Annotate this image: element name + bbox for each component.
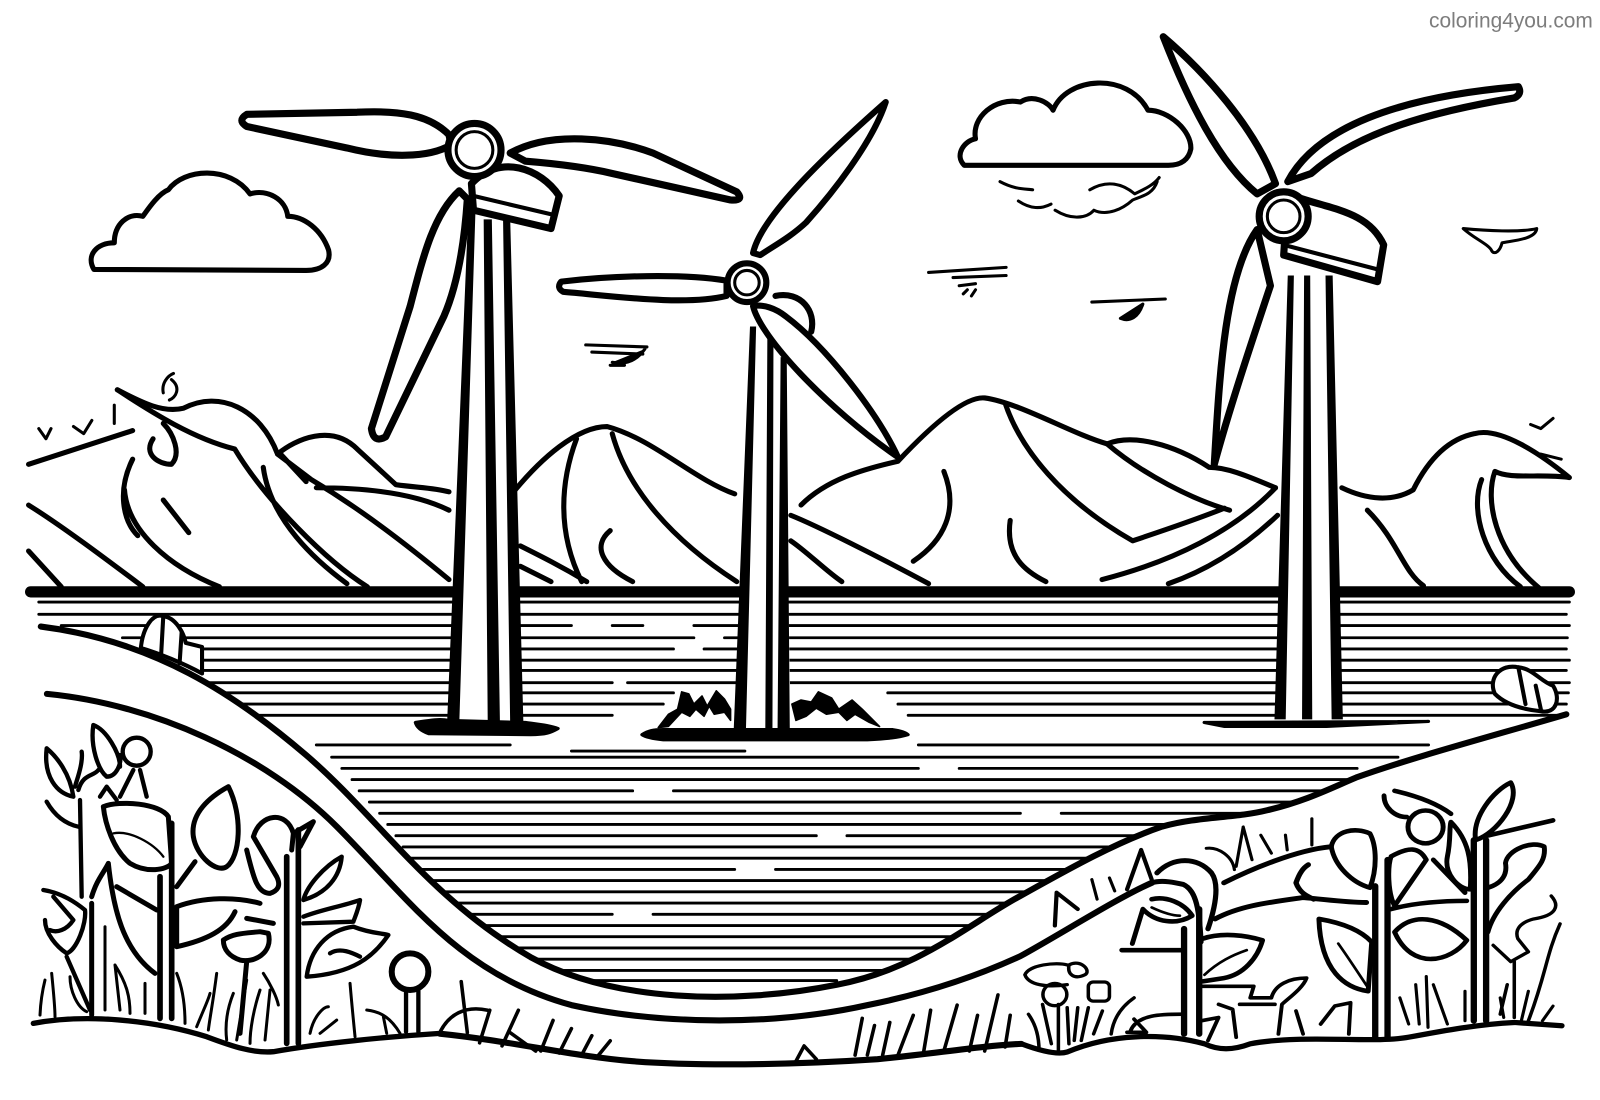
turbine tower: centre: [642, 316, 908, 740]
horizon line: [31, 586, 1569, 597]
water lines: [39, 602, 1569, 981]
turbine blades: centre: [559, 102, 898, 457]
turbine blades: right: [1163, 37, 1520, 464]
small shrubs at shoreline: [141, 616, 1557, 712]
mountains: centre peak: [515, 427, 929, 584]
turbine tower: right: [1274, 270, 1343, 719]
cloud: centre right: [960, 83, 1191, 217]
birds and small wisps in the sky: [586, 229, 1537, 365]
reed tufts at centre tower: [658, 691, 880, 728]
shoreline and foreground land: [31, 627, 1571, 1061]
ground line: middle: [440, 1034, 1021, 1064]
plants: left: [33, 725, 440, 1052]
mountains: right range: [801, 398, 1569, 588]
plants: right: [1021, 783, 1562, 1053]
watermark: coloring4you.com: [1429, 10, 1593, 33]
turbine tower: left: [415, 209, 558, 735]
grass: middle: [441, 982, 1010, 1061]
cloud: left: [91, 173, 329, 270]
mountains: left range: [29, 373, 449, 587]
turbine blades: left: [242, 112, 740, 439]
